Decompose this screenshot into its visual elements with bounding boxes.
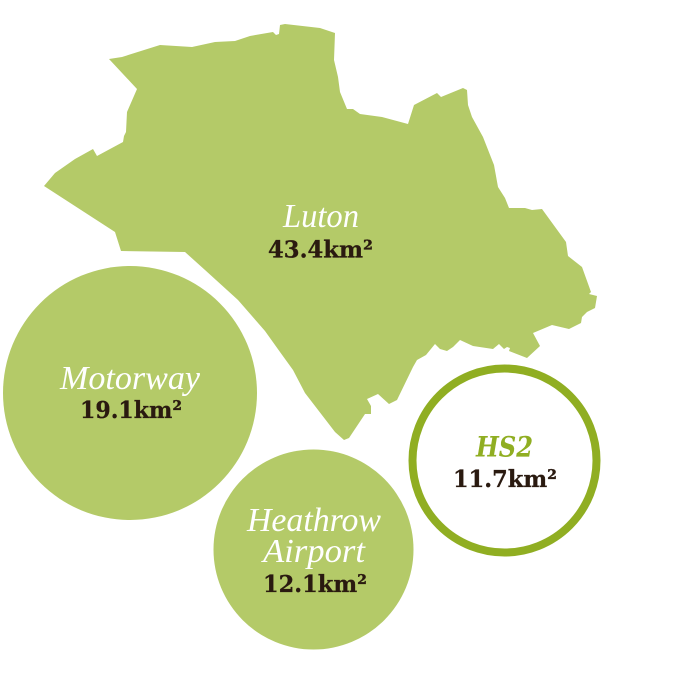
circle: HS2 xyxy=(412,368,596,552)
circle: HS2: 11.7km² xyxy=(453,465,557,493)
circle: HS2: HS2 xyxy=(475,430,533,464)
circle: Heathrow Airport: 12.1km² xyxy=(263,570,367,598)
circle: Heathrow Airport: Airport xyxy=(261,533,367,570)
circle: Motorway xyxy=(3,266,257,520)
label: Luton: Luton xyxy=(282,198,359,235)
circle: Motorway: 19.1km² xyxy=(80,396,182,424)
circle: Heathrow Airport xyxy=(214,450,414,650)
circle: Heathrow Airport: Heathrow xyxy=(246,502,381,539)
map: Luton area shape xyxy=(44,24,597,440)
label: Luton: 43.4km² xyxy=(268,236,373,264)
circle: Motorway: Motorway xyxy=(59,360,201,397)
label: Luton xyxy=(268,198,373,264)
